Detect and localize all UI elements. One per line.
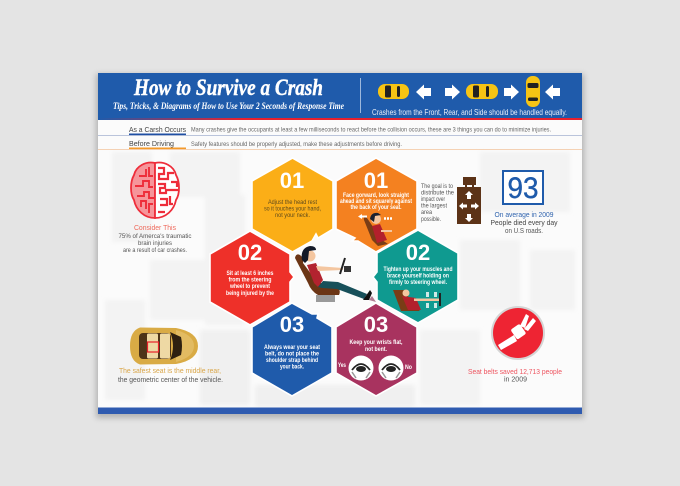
stat: 93 deaths per day: on U.S roads. xyxy=(505,228,543,235)
hexagon: head rest: not your neck. xyxy=(275,212,310,219)
icon: brain xyxy=(131,163,179,218)
icon: correct wrist position xyxy=(348,356,374,380)
icon: car top view xyxy=(130,328,198,364)
hexagon: face forward: 01 xyxy=(364,168,388,193)
hexagon: sit back from wheel: from the steering xyxy=(228,276,272,284)
label: no: No xyxy=(405,364,412,371)
consider this text: are a result of car crashes. xyxy=(123,247,187,254)
hexagon: wrists flat: 03 xyxy=(364,312,388,337)
hexagon: seat belt: 03 xyxy=(280,312,304,337)
goal text xyxy=(421,183,454,223)
consider this text xyxy=(118,223,192,254)
label: yes: Yes xyxy=(338,362,346,369)
safest seat text: The safest seat is the middle rear, xyxy=(119,368,221,375)
hexagon: sit back from wheel: 02 xyxy=(238,240,262,265)
hexagon: face forward xyxy=(336,158,417,252)
hexagon: tighten muscles: 02 xyxy=(406,240,430,265)
hexagon: seat belt: belt, do not place the xyxy=(265,350,319,358)
hexagon: seat belt: Always wear your seat xyxy=(264,344,321,351)
stat: 93 deaths per day: On average in 2009 xyxy=(494,210,554,219)
stat: 93 deaths per day: 93 xyxy=(508,172,538,205)
icon: seated driver facing forward xyxy=(358,213,392,246)
hexagon: sit back from wheel xyxy=(210,231,294,325)
goal text: area xyxy=(421,209,432,216)
icon: braced driver xyxy=(393,290,441,311)
crash directions caption: Crashes from the Front, Rear, and Side should be handled equally. xyxy=(372,107,567,117)
hexagon: sit back from wheel: being injured by the xyxy=(226,290,274,297)
icon: seat with force arrows xyxy=(457,177,481,224)
goal text: impact over xyxy=(421,196,446,203)
safest seat text xyxy=(118,368,223,384)
hexagon: wrists flat: not bent. xyxy=(365,346,387,353)
seat belts saved text: in 2009 xyxy=(504,376,527,384)
arrow: right to side car xyxy=(504,84,519,100)
hexagon: sit back from wheel: Sit at least 6 inches xyxy=(226,270,274,277)
arrow: left to side car xyxy=(545,84,560,100)
row: before driving xyxy=(98,139,582,150)
hexagon: tighten muscles: Tighten up your muscles and xyxy=(384,266,453,273)
seat belts saved text: Seat belts saved 12,713 people xyxy=(468,367,562,376)
goal text: The goal is to xyxy=(421,183,453,190)
hexagon: head rest: Adjust the head rest xyxy=(268,199,317,206)
icon: incorrect wrist position xyxy=(378,356,404,380)
consider this text: Consider This xyxy=(134,223,176,232)
icon: front crash car xyxy=(378,84,409,99)
poster background xyxy=(98,73,582,414)
stat: 93 deaths per day: People died every day xyxy=(490,218,558,227)
hexagon: seat belt: shoulder strap behind xyxy=(266,357,318,364)
arrow: left xyxy=(416,84,431,100)
hexagon: sit back from wheel: wheel to prevent xyxy=(229,283,271,290)
center illustration: driver in seat xyxy=(295,246,376,302)
hexagon: seat belt: your back. xyxy=(280,364,304,370)
seat belts saved text xyxy=(468,367,562,384)
icon: side crash car xyxy=(526,76,540,107)
hexagon: head rest xyxy=(252,158,333,252)
hexagon: tighten muscles: firmly to steering wheel. xyxy=(389,279,447,286)
consider this text: brain injuries xyxy=(138,240,172,247)
hexagon: tighten muscles xyxy=(373,230,458,323)
hexagon: head rest: so it touches your hand, xyxy=(264,206,321,212)
row: as a crash occurs: As a Carsh Occurs xyxy=(129,125,186,134)
safest seat text: the geometric center of the vehicle. xyxy=(118,377,223,384)
icon: rear crash car xyxy=(466,84,498,99)
hexagon: head rest: 01 xyxy=(280,168,304,193)
row: as a crash occurs xyxy=(98,125,582,136)
consider this text: 75% of Amerca's traumatic xyxy=(118,233,192,240)
hexagon: face forward: ahead and sit squarely against xyxy=(340,198,413,205)
goal text: possible. xyxy=(421,216,441,223)
row: before driving: Safety features should be properly adjusted, make these adjustments before driving. xyxy=(191,141,402,148)
stat: 93 deaths per day xyxy=(490,171,558,235)
subtitle: Tips, Tricks, & Diagrams of How to Use Your 2 Seconds of Response Time xyxy=(113,101,344,111)
goal text: distribute the xyxy=(421,190,454,196)
bottom bar xyxy=(98,408,582,414)
hexagon: seat belt xyxy=(252,303,332,396)
goal text: the largest xyxy=(421,202,447,210)
hexagon: tighten muscles: brace yourself holding on xyxy=(387,272,449,280)
hexagon: face forward: the back of your seat. xyxy=(350,204,402,211)
arrow: right xyxy=(445,84,460,100)
row: as a crash occurs: Many crashes give the occupants at least a few milliseconds to react before the collision occurs, these are 3 things you can do to minimize injuries. xyxy=(191,126,551,134)
header band xyxy=(98,73,582,120)
hexagon: wrists flat: Keep your wrists flat, xyxy=(350,339,403,346)
icon: seat belt badge xyxy=(491,306,545,360)
hexagon: face forward: Face gorward, look straight xyxy=(343,192,410,199)
row: before driving: Before Driving xyxy=(129,139,174,148)
title: How to Survive a Crash xyxy=(133,75,323,100)
hexagon: wrists flat xyxy=(336,303,417,396)
